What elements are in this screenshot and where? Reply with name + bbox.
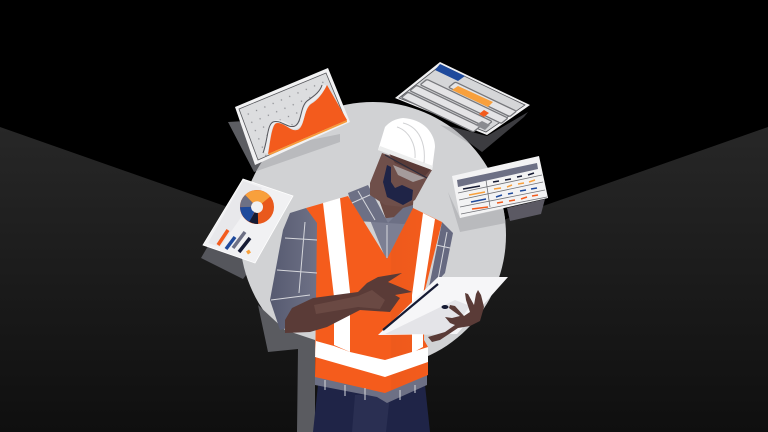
vest [306, 196, 442, 393]
trousers [313, 385, 430, 432]
arm and pointing hand [285, 273, 412, 333]
gantt rows [401, 72, 516, 137]
orange area [268, 85, 347, 154]
neck [372, 178, 415, 225]
bars [218, 230, 250, 253]
holding hand [428, 290, 484, 342]
panel: donut and bars [203, 179, 293, 263]
vest reflective stripes [315, 198, 435, 377]
chest [370, 215, 412, 262]
panel shadows on circle [256, 125, 506, 232]
trend line [263, 85, 322, 153]
beard [383, 165, 413, 205]
right sleeve [428, 222, 453, 292]
panel: gantt [395, 62, 530, 137]
panel: area chart [235, 68, 350, 165]
forearm highlight [314, 290, 385, 314]
table header [457, 163, 538, 187]
safety glasses [385, 155, 427, 182]
panel shadows on dark background [201, 112, 545, 279]
shirt hem [315, 375, 427, 403]
tablet button [442, 305, 448, 309]
collar [348, 185, 414, 224]
donut chart [246, 196, 268, 219]
face [370, 153, 432, 207]
brow shadow [388, 152, 432, 176]
grey circle [240, 102, 506, 368]
table bars [463, 173, 538, 209]
hard hat [378, 118, 435, 170]
left sleeve [270, 208, 318, 330]
trend highlight band [266, 85, 325, 153]
dark floor shape [0, 127, 768, 432]
plaid lines [271, 191, 450, 400]
figure shadow [258, 305, 315, 432]
gantt bars [435, 64, 465, 81]
panel: table [452, 156, 548, 218]
tablet [378, 277, 508, 335]
figure: engineer [270, 118, 508, 432]
